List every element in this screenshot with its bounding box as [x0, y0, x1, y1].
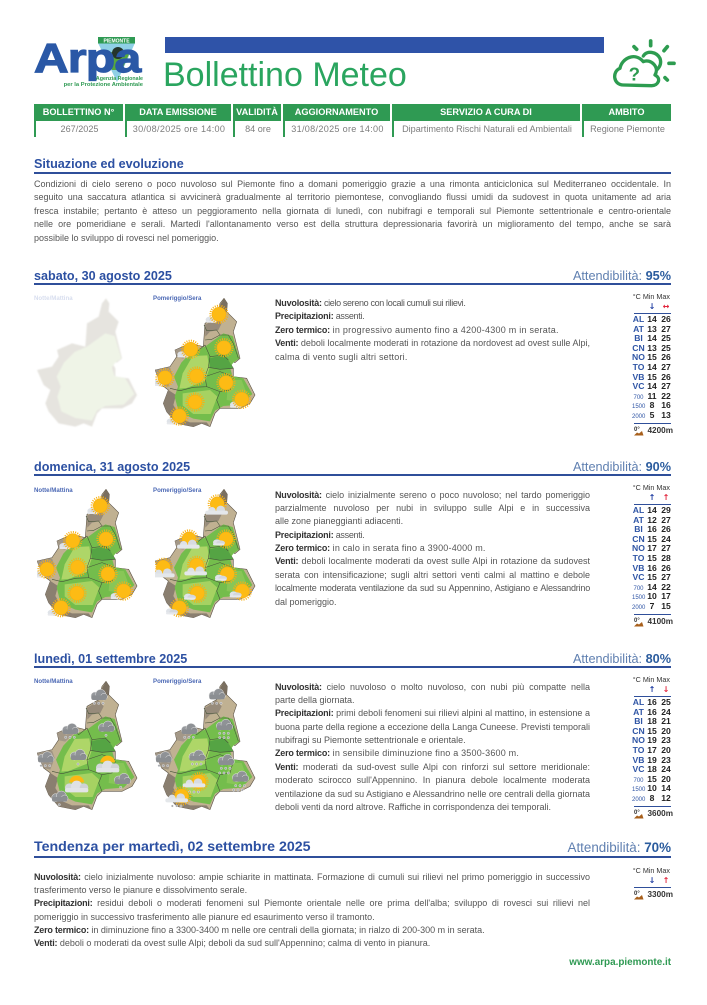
- temperature table day 1: AT: [633, 324, 644, 334]
- temperature table day 1: 26: [661, 314, 671, 324]
- map: day 3 afternoon: [155, 681, 256, 810]
- column: bollettino: [34, 104, 123, 137]
- temperature table day 2: [632, 483, 673, 626]
- text: tendenza: trasferimento verso le pianure e dissolvimento serale.: [34, 885, 247, 895]
- temperature table day 3: 3600m: [648, 809, 673, 818]
- temperature table day 1: ↔: [663, 302, 669, 310]
- temperature table day 3: 24: [661, 764, 671, 774]
- temperature table day 1: 14: [647, 381, 657, 391]
- info table: 84 ore: [245, 124, 271, 134]
- text: forecast day 2: Nuvolosità: cielo inizialmente sereno o poco nuvoloso; nel tardo pomeriggio: [275, 490, 590, 500]
- temperature table day 3: 20: [661, 774, 671, 784]
- temperature table day 1: ↓: [649, 302, 655, 310]
- temperature table day 2: ↑: [663, 492, 669, 502]
- label: notte/mattina day 2: Notte/Mattina: [34, 487, 73, 494]
- temperature table day 2: ↑: [649, 492, 655, 502]
- text: situazione: nelle ore pomeridiane e serali. Martedì l'allontanamento verso est della struttura depressionaria favorirà un miglioramento del tempo, anche se sarà: [34, 219, 671, 229]
- column: aggiornamento: [283, 104, 390, 137]
- temperature table day 3: 15: [647, 726, 657, 736]
- text: forecast day 3: Zero termico: in sensibile diminuzione fino a 3500-3600 m.: [275, 748, 519, 758]
- logo: Arpa Piemonte: PIEMONTE: [103, 38, 130, 44]
- text: forecast day 3: [275, 682, 590, 812]
- temperature box tendenza: ↑: [663, 876, 669, 884]
- temperature table day 2: 15: [661, 601, 671, 611]
- temperature table day 3: °C Min Max: [633, 675, 670, 684]
- temperature table day 1: 26: [661, 352, 671, 362]
- text: tendenza: Venti: deboli o moderati da ovest sulle Alpi; deboli da sud sull'Appennino; calma di vento in pianura.: [34, 938, 430, 948]
- temperature table day 2: 2000: [632, 605, 645, 611]
- text: forecast day 2: Precipitazioni: assenti.: [275, 530, 364, 540]
- header bar: [165, 37, 604, 53]
- temperature table day 2: 14: [647, 505, 657, 515]
- text: situazione: [34, 179, 671, 243]
- temperature table day 1: 0°: [634, 427, 640, 433]
- text: tendenza: Precipitazioni: residui deboli o moderati fenomeni sul Piemonte orientale nelle ore prima dell'alba; sviluppo di rovesci sui rilievi nel: [34, 898, 590, 908]
- temperature table day 3: VB: [633, 755, 644, 765]
- temperature table day 1: BI: [634, 333, 643, 343]
- column: validità: [233, 104, 281, 137]
- info table: DATA EMISSIONE: [139, 107, 217, 117]
- temperature table day 1: NO: [632, 352, 645, 362]
- temperature table day 1: 5: [650, 410, 654, 420]
- temperature box tendenza: ↓: [649, 876, 655, 884]
- temperature table day 2: 16: [647, 563, 657, 573]
- temperature table day 1: 2000: [632, 414, 645, 420]
- info table: AGGIORNAMENTO: [295, 107, 378, 117]
- text: forecast day 3: Precipitazioni: primi deboli fenomeni sui rilievi alpini al mattino, in estensione a: [275, 708, 590, 718]
- heading: domenica: [34, 459, 671, 476]
- temperature table day 1: 13: [647, 343, 657, 353]
- temperature table day 2: 24: [661, 534, 671, 544]
- heading: situazione ed evoluzione: Situazione ed evoluzione: [34, 157, 184, 171]
- map: day 2 afternoon: [155, 489, 256, 618]
- temperature table day 1: VC: [633, 381, 644, 391]
- temperature table day 3: 23: [661, 755, 671, 765]
- temperature table day 3: 19: [647, 735, 657, 745]
- column: data emissione: [125, 104, 231, 137]
- temperature table day 1: 8: [650, 400, 654, 410]
- heading: sabato: Attendibilità: 95%: [573, 269, 671, 283]
- text: tendenza: pomeriggio in successivo trasferimento alle pianure ed esaurimento verso il tramonto.: [34, 912, 375, 922]
- heading: situazione ed evoluzione: [34, 156, 671, 174]
- temperature table day 1: 15: [647, 372, 657, 382]
- map: day 1 afternoon: [155, 298, 256, 427]
- temperature table day 2: 0°: [634, 618, 640, 624]
- text: forecast day 2: alle zone pianeggianti adiacenti.: [275, 516, 403, 526]
- info table: 267/2025: [61, 124, 98, 134]
- temperature table day 3: 23: [661, 735, 671, 745]
- temperature table day 2: 27: [661, 543, 671, 553]
- temperature table day 1: 27: [661, 324, 671, 334]
- info table: AMBITO: [608, 107, 645, 117]
- text: forecast day 3: Venti: moderati da sud-ovest sulle Alpi con rinforzi sul settore meridionale:: [275, 762, 590, 772]
- text: forecast day 1: [275, 298, 590, 362]
- temperature table day 3: 24: [661, 707, 671, 717]
- text: forecast day 1: Nuvolosità: cielo sereno con locali cumuli sui rilievi.: [275, 298, 465, 308]
- temperature table day 3: 21: [661, 716, 671, 726]
- temperature table day 3: VC: [633, 764, 644, 774]
- heading: domenica: domenica, 31 agosto 2025: [34, 460, 190, 474]
- temperature table day 3: NO: [632, 735, 645, 745]
- temperature box tendenza: [633, 866, 673, 900]
- temperature table day 1: °C Min Max: [633, 292, 670, 301]
- temperature table day 1: TO: [633, 362, 644, 372]
- temperature table day 1: 14: [647, 314, 657, 324]
- info table: VALIDITÀ: [236, 107, 278, 117]
- temperature table day 2: 14: [647, 582, 657, 592]
- map: day 3 night: [37, 681, 138, 810]
- temperature table day 1: [632, 292, 673, 436]
- temperature table day 2: 17: [647, 543, 657, 553]
- temperature table day 2: 26: [661, 524, 671, 534]
- temperature table day 1: AL: [633, 314, 644, 324]
- temperature table day 2: 17: [661, 591, 671, 601]
- temperature table day 3: CN: [632, 726, 645, 736]
- temperature table day 1: 13: [647, 324, 657, 334]
- temperature box tendenza: °C Min Max: [633, 866, 670, 875]
- temperature table day 1: CN: [632, 343, 645, 353]
- temperature table day 2: 29: [661, 505, 671, 515]
- text: forecast day 2: serata con intensificazione; sugli altri settori venti calmi al mattino e debole: [275, 570, 590, 580]
- temperature table day 2: AT: [633, 515, 644, 525]
- temperature table day 2: 15: [647, 534, 657, 544]
- temperature table day 3: 25: [661, 697, 671, 707]
- temperature table day 2: 7: [650, 601, 654, 611]
- text: tendenza: Zero termico: in diminuzione fino a 3300-3400 m nelle ore centrali della giornata; in rialzo di 200-300 m in serata.: [34, 925, 485, 935]
- temperature table day 3: 2000: [632, 797, 645, 803]
- text: forecast day 3: deboli venti da nord altrove. Raffiche in corrispondenza dei temporali.: [275, 802, 551, 812]
- info table: 31/08/2025 ore 14:00: [291, 124, 384, 134]
- temperature table day 2: 4100m: [648, 617, 673, 626]
- temperature table day 1: 14: [647, 333, 657, 343]
- temperature table day 1: 14: [647, 362, 657, 372]
- temperature table day 1: VB: [633, 372, 644, 382]
- temperature table day 2: 22: [661, 582, 671, 592]
- text: forecast day 3: moderato scirocco sull'Appennino. In pianura debole localmente moderata: [275, 775, 590, 785]
- temperature table day 3: ↑: [649, 684, 655, 694]
- temperature table day 3: 15: [647, 774, 657, 784]
- temperature table day 1: 22: [661, 391, 671, 401]
- heading: tendenza: Tendenza per martedì, 02 settembre 2025: [34, 839, 311, 855]
- temperature table day 3: AT: [633, 707, 644, 717]
- temperature table day 3: 18: [647, 716, 657, 726]
- text: situazione: seguito una saccatura atlantica si avvicinerà gradualmente al territorio piemontese, convogliando flussi umidi da sudovest in quota unitamente ad aria: [34, 192, 671, 202]
- temperature table day 1: 4200m: [648, 426, 673, 435]
- temperature table day 3: 14: [661, 783, 671, 793]
- temperature table day 2: 28: [661, 553, 671, 563]
- temperature table day 1: 27: [661, 362, 671, 372]
- temperature table day 3: 20: [661, 726, 671, 736]
- temperature table day 3: 16: [647, 707, 657, 717]
- logo: Arpa Piemonte: Arpa: [34, 36, 142, 81]
- temperature table day 3: BI: [634, 716, 643, 726]
- label: pomeriggio/sera day 2: Pomeriggio/Sera: [153, 487, 201, 494]
- label: notte/mattina day 1: Notte/Mattina: [34, 295, 73, 302]
- temperature table day 2: NO: [632, 543, 645, 553]
- temperature table day 2: 12: [647, 515, 657, 525]
- text: tendenza: Nuvolosità: cielo inizialmente nuvoloso: ampie schiarite in mattinata. Formazione di cumuli sui rilievi nel primo pomeriggio in successivo: [34, 872, 590, 882]
- heading: domenica: Attendibilità: 90%: [573, 460, 671, 474]
- temperature table day 1: 13: [661, 410, 671, 420]
- heading: lunedì: [34, 651, 671, 668]
- text: forecast day 2: [275, 490, 590, 607]
- temperature table day 2: 10: [647, 591, 657, 601]
- temperature table day 3: 10: [647, 783, 657, 793]
- column: servizio: [392, 104, 580, 137]
- logo: Arpa Piemonte: per la Protezione Ambientale: [64, 82, 144, 88]
- text: forecast day 1: Precipitazioni: assenti.: [275, 311, 364, 321]
- temperature table day 3: [632, 675, 673, 818]
- temperature table day 3: 17: [647, 745, 657, 755]
- temperature table day 1: 27: [661, 381, 671, 391]
- temperature table day 3: ↓: [663, 684, 669, 694]
- temperature table day 1: 16: [661, 400, 671, 410]
- map: day 1 night (faded): [37, 298, 137, 427]
- temperature table day 2: 700: [633, 586, 644, 592]
- temperature box tendenza: 0°: [634, 891, 640, 897]
- temperature table day 3: 19: [647, 755, 657, 765]
- info table: 30/08/2025 ore 14:00: [133, 124, 225, 134]
- temperature table day 3: 16: [647, 697, 657, 707]
- info table: [34, 104, 671, 137]
- temperature table day 1: 15: [647, 352, 657, 362]
- heading: lunedì: Attendibilità: 80%: [573, 652, 671, 666]
- text: forecast day 3: parte della giornata.: [275, 695, 355, 705]
- temperature table day 3: AL: [633, 697, 644, 707]
- temperature table day 1: 11: [647, 391, 657, 401]
- temperature table day 2: 15: [647, 553, 657, 563]
- text: situazione: fresca instabile; pertanto è atteso un peggioramento nella giornata di lunedì, con nubifragi e temporali sul Piemonte settentrionale e centro-orientale: [34, 206, 671, 216]
- temperature table day 2: °C Min Max: [633, 483, 670, 492]
- temperature table day 2: 27: [661, 515, 671, 525]
- temperature table day 2: 26: [661, 563, 671, 573]
- temperature table day 3: 700: [633, 778, 644, 784]
- icon: cloud with question mark and sun: ?: [629, 63, 640, 84]
- info table: Regione Piemonte: [590, 124, 665, 134]
- heading: tendenza: Attendibilità: 70%: [568, 840, 671, 855]
- temperature box tendenza: 3300m: [648, 890, 673, 899]
- heading: tendenza: [34, 838, 671, 858]
- temperature table day 2: VC: [633, 572, 644, 582]
- temperature table day 1: 25: [661, 333, 671, 343]
- temperature table day 2: 15: [647, 572, 657, 582]
- info table: SERVIZIO A CURA DI: [440, 107, 532, 117]
- text: forecast day 2: dal pomeriggio.: [275, 597, 337, 607]
- temperature table day 3: 1500: [632, 787, 645, 793]
- text: forecast day 1: Zero termico: in progressivo aumento fino a 4200-4300 m in serata.: [275, 325, 559, 335]
- temperature table day 3: TO: [633, 745, 644, 755]
- column: ambito: [582, 104, 671, 137]
- label: pomeriggio/sera day 1: Pomeriggio/Sera: [153, 295, 201, 302]
- text: forecast day 2: localmente moderata ventilazione da sud su Appennino, Astigiano e Alessandrino: [275, 583, 590, 593]
- temperature table day 2: 16: [647, 524, 657, 534]
- text: forecast day 3: nubifragi su Piemonte settentrionale e orientale.: [275, 735, 466, 745]
- temperature table day 2: 27: [661, 572, 671, 582]
- info table: BOLLETTINO N°: [43, 107, 114, 117]
- heading: sabato: sabato, 30 agosto 2025: [34, 269, 172, 283]
- temperature table day 2: CN: [632, 534, 645, 544]
- label: notte/mattina day 3: Notte/Mattina: [34, 678, 73, 685]
- text: situazione: Condizioni di cielo sereno o poco nuvoloso sul Piemonte fino a domani pomeriggio grazie a una rimonta anticiclonica sul Mediterraneo occidentale. In: [34, 179, 671, 189]
- temperature table day 3: 12: [661, 793, 671, 803]
- label: pomeriggio/sera day 3: Pomeriggio/Sera: [153, 678, 201, 685]
- temperature table day 1: 26: [661, 372, 671, 382]
- temperature table day 2: VB: [633, 563, 644, 573]
- title: Bollettino Meteo: [163, 56, 407, 94]
- text: forecast day 2: Zero termico: in calo in serata fino a 3900-4000 m.: [275, 543, 486, 553]
- temperature table day 1: 25: [661, 343, 671, 353]
- temperature table day 3: 0°: [634, 810, 640, 816]
- map: day 2 night: [37, 489, 138, 618]
- temperature table day 3: 20: [661, 745, 671, 755]
- text: forecast day 1: calma di vento sugli altri settori.: [275, 352, 408, 362]
- temperature table day 1: 1500: [632, 404, 645, 410]
- temperature table day 2: TO: [633, 553, 644, 563]
- temperature table day 1: 700: [633, 395, 644, 401]
- heading: lunedì: lunedì, 01 settembre 2025: [34, 652, 187, 666]
- text: tendenza: [34, 872, 590, 948]
- temperature table day 3: 18: [647, 764, 657, 774]
- info table: Dipartimento Rischi Naturali ed Ambientali: [402, 124, 572, 134]
- icon: cloud with question mark and sun: [613, 39, 676, 88]
- temperature table day 2: AL: [633, 505, 644, 515]
- temperature table day 2: BI: [634, 524, 643, 534]
- heading: sabato: [34, 268, 671, 285]
- temperature table day 2: 1500: [632, 595, 645, 601]
- logo: Arpa Piemonte: Agenzia Regionale: [96, 76, 143, 82]
- text: forecast day 1: Venti: deboli localmente moderati in rotazione da nordovest ad ovest sulle Alpi,: [275, 338, 590, 348]
- text: situazione: possibile lo sviluppo di rovesci nel pomeriggio.: [34, 233, 219, 243]
- temperature table day 3: 8: [650, 793, 654, 803]
- footer link: www.arpa.piemonte.it: [569, 957, 671, 968]
